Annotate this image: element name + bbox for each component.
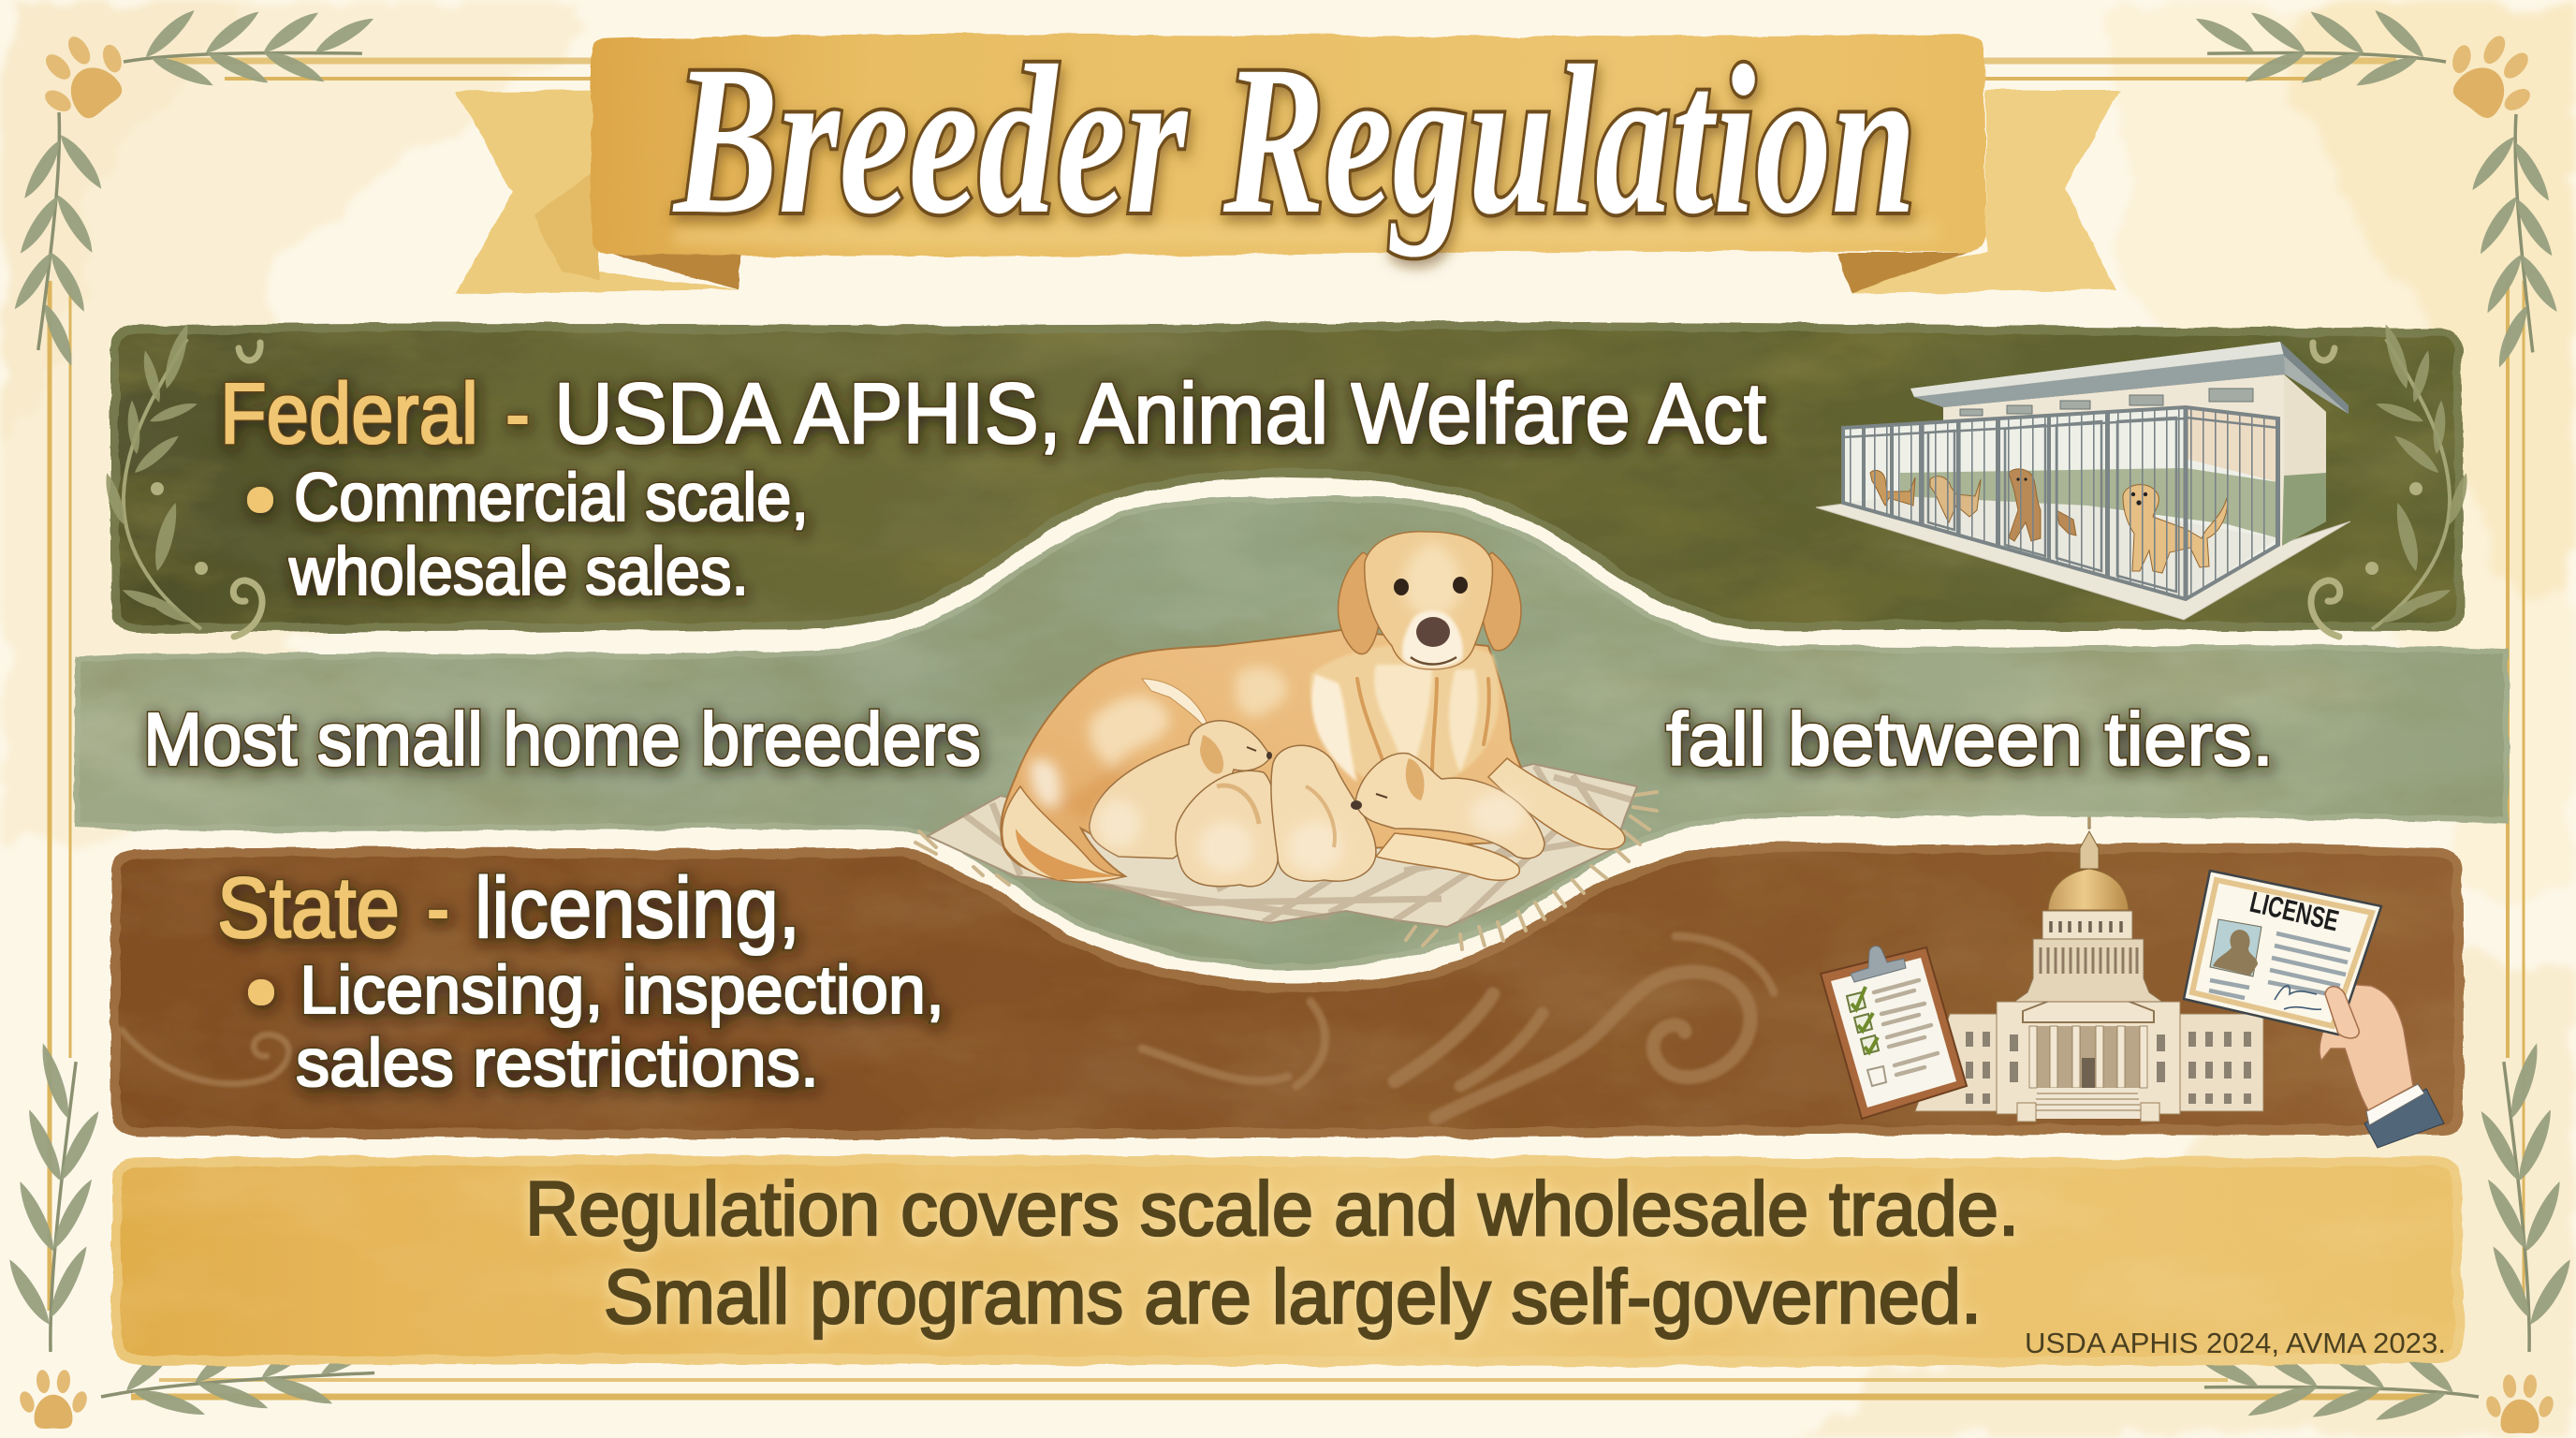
mother dog rump tuft <box>1142 679 1212 740</box>
state bullet text <box>249 953 944 1101</box>
title: Regulation <box>1222 22 1916 258</box>
federal bullet text <box>248 461 809 609</box>
panel: state tier <box>110 811 2464 1148</box>
kennel slab <box>1816 504 2350 620</box>
federal heading: USDA APHIS, Animal Welfare Act <box>554 366 1766 462</box>
federal bullet text: wholesale sales. <box>288 535 749 609</box>
panel: takeaway <box>112 1155 2464 1366</box>
license photo <box>2210 919 2261 976</box>
state heading: State <box>217 860 400 956</box>
kennel wall <box>1943 374 2326 546</box>
ribbon wash highlights <box>674 221 1938 247</box>
puppy 4 <box>1355 753 1544 858</box>
puppy 1 <box>1090 721 1271 858</box>
illustration: mother dog and puppies on blanket <box>915 532 1657 949</box>
state heading: licensing, <box>475 860 800 956</box>
state heading: - <box>427 860 449 956</box>
middle tier text right: fall between tiers. <box>1666 697 2274 781</box>
takeaway watercolor fill <box>112 1155 2464 1366</box>
mother dog blaze <box>1403 541 1461 618</box>
federal bullet text: Commercial scale, <box>294 461 809 536</box>
capitol drum <box>2014 939 2162 1002</box>
icon: kennel building with dogs <box>1816 342 2350 620</box>
mother dog front legs <box>1488 758 1625 849</box>
title: Breeder <box>672 22 1189 258</box>
capitol wings <box>1915 1014 2263 1111</box>
clipboard clip <box>1851 946 1906 982</box>
capitol pediment <box>2023 986 2154 1022</box>
panel: federal tier <box>101 322 2472 637</box>
kennel roof <box>1910 342 2349 414</box>
blanket fringe <box>915 792 1657 949</box>
icon: hand holding license <box>2184 871 2444 1148</box>
kennel frames <box>1843 407 2278 599</box>
middle watercolor fill <box>75 497 2509 969</box>
source citation: USDA APHIS 2024, AVMA 2023. <box>2025 1327 2446 1359</box>
clipboard paper <box>1831 958 1956 1108</box>
state background swirls <box>122 936 1774 1118</box>
mother dog coat highlights <box>1030 667 1287 824</box>
kennel vents <box>1960 389 2253 416</box>
icon: capitol building <box>1915 811 2263 1122</box>
state watercolor fill <box>110 843 2464 1139</box>
title banner ribbon <box>456 34 2121 294</box>
federal heading: Federal <box>220 366 478 462</box>
ribbon tails <box>456 34 2121 294</box>
hand <box>2320 983 2413 1110</box>
clipboard checks <box>1847 987 1886 1086</box>
license card <box>2184 871 2381 1034</box>
capitol lantern and spire <box>2080 811 2099 869</box>
kennel interior <box>1843 407 2278 599</box>
ribbon main body <box>592 34 1986 257</box>
license signature <box>2275 986 2321 1009</box>
license heading: LICENSE <box>2247 886 2342 937</box>
mother dog body <box>1001 630 1535 879</box>
blanket <box>928 764 1637 927</box>
mother dog chest <box>1310 643 1500 796</box>
capitol steps <box>2031 1088 2144 1119</box>
panel: middle tier <box>75 497 2509 969</box>
puppy 2 <box>1176 770 1278 887</box>
blanket plaid stripes <box>964 766 1633 922</box>
sleeve <box>2364 1089 2444 1148</box>
clipboard board <box>1821 947 1967 1119</box>
capitol dome <box>2048 869 2129 910</box>
mother dog face <box>1394 579 1409 595</box>
takeaway text <box>525 1167 2019 1340</box>
capitol central block <box>1997 1002 2180 1114</box>
middle tier text left: Most small home breeders <box>143 697 981 781</box>
kennel bars <box>1843 407 2186 599</box>
mother dog muzzle <box>1402 610 1463 668</box>
takeaway text: Regulation covers scale and wholesale trade. <box>525 1167 2019 1252</box>
kennel dogs <box>1870 469 2227 573</box>
state bullet text: sales restrictions. <box>296 1026 819 1101</box>
mother dog head <box>1365 532 1492 669</box>
mother dog near paw <box>1376 833 1519 880</box>
federal watercolor fill <box>110 322 2464 633</box>
state heading <box>217 860 800 956</box>
mother dog tail <box>1003 786 1125 882</box>
license lines <box>2209 933 2350 998</box>
mother dog ears <box>1339 552 1382 654</box>
state bullet text: Licensing, inspection, <box>300 953 944 1028</box>
icon: clipboard checklist <box>1821 946 1967 1119</box>
federal heading: - <box>505 366 530 462</box>
thumb <box>2325 987 2359 1038</box>
title <box>672 22 1916 258</box>
federal corner vines <box>101 322 2472 637</box>
puppy 3 <box>1271 745 1376 881</box>
takeaway text: Small programs are largely self-governed. <box>604 1255 1982 1340</box>
